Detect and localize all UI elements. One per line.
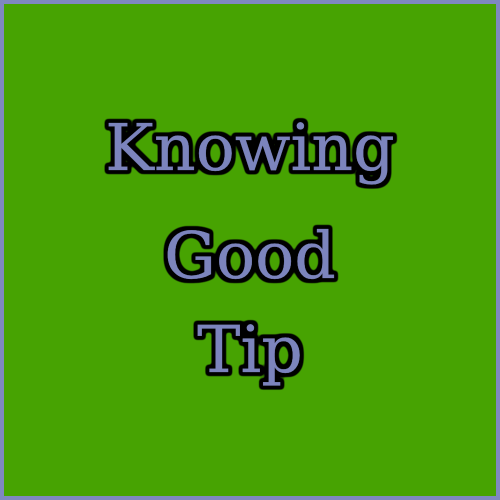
title line: Knowing: Knowing <box>105 111 395 186</box>
title <box>105 111 395 388</box>
title line: Good: Good <box>164 219 336 294</box>
title line: Tip: Tip <box>197 313 303 388</box>
